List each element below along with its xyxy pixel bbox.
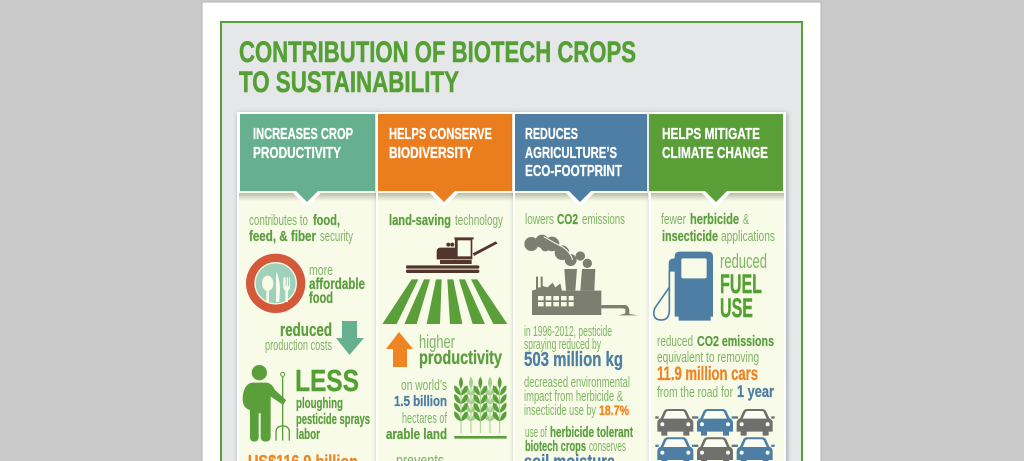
text: pesticide spraying reduced: in 1996-2012, pesticide [524,324,612,340]
icon: down arrow [336,321,364,355]
icon: fuel pump [654,252,713,321]
header: helps conserve biodiversity: BIODIVERSITY [389,145,473,162]
text: world arable land: on world’s [401,378,447,394]
header: helps mitigate climate change [649,114,783,207]
text: reduced fuel use: reduced [720,251,767,273]
text: more affordable food: affordable [309,276,365,293]
header: increases crop productivity [240,114,375,207]
text: herbicide tolerant soil moisture: use of [525,425,548,441]
text: reduced fuel use: USE [720,293,753,323]
header: helps mitigate climate change: CLIMATE CHANGE [662,145,768,162]
text: decreased environmental impact: decreased environmental [524,375,630,391]
text: more affordable food: food [309,290,333,307]
text: herbicide tolerant soil moisture [524,425,633,461]
panel: column 1 increases crop productivity [238,113,377,461]
text: less ploughing pesticide sprays labor: labor [296,427,320,443]
text: food feed fiber security: contributes to [249,213,308,229]
text: reduced fuel use: FUEL [720,269,762,299]
text: less ploughing pesticide sprays labor: pesticide sprays [296,412,370,428]
title [239,36,636,99]
text: reduced fuel use [720,251,767,323]
text: more affordable food [309,263,365,307]
text: CO2 equivalent cars: CO2 emissions [697,334,774,350]
text: fewer herbicide insecticide applications: insecticide [662,229,718,245]
panel: green-framed background [221,22,802,461]
text: decreased environmental impact [524,375,630,419]
text: world arable land: hectares of [402,411,448,427]
header: increases crop productivity: PRODUCTIVITY [253,145,341,162]
text: CO2 equivalent cars: 11.9 million cars [657,364,758,385]
text: decreased environmental impact: impact from herbicide & [524,389,623,405]
text: world arable land: arable land [386,427,447,443]
text: fewer herbicide insecticide applications [661,212,775,245]
text: higher productivity: higher [419,332,455,352]
text: world arable land: 1.5 billion [394,393,447,410]
header: reduces agriculture's eco-footprint: REDUCES [525,126,578,143]
icon: plate with cutlery [246,254,305,313]
text: CO2 equivalent cars: reduced [657,334,693,350]
text: less ploughing pesticide sprays labor: LESS [295,363,359,398]
text: CO2 equivalent cars: from the road for [657,385,733,401]
title: CONTRIBUTION OF BIOTECH CROPS [239,36,636,69]
header: reduces agriculture's eco-footprint: ECO-FOOTPRINT [525,163,622,180]
text: food feed fiber security: food, [313,213,340,229]
text: CO2 equivalent cars: 1 year [737,382,774,401]
text: higher productivity: productivity [419,348,502,369]
header: helps mitigate climate change: HELPS MITIGATE [662,126,760,143]
icon: rows of cars [655,409,775,461]
text: CO2 equivalent cars [657,334,774,401]
text: higher productivity [419,332,502,369]
icon: up arrow [386,332,413,367]
icon: combine harvester on field [382,237,507,324]
text: herbicide tolerant soil moisture: herbicide tolerant [550,425,633,441]
text: reduced production costs: production costs [265,338,332,354]
title: TO SUSTAINABILITY [239,66,459,99]
text: food feed fiber security [249,213,353,245]
text: CO2 equivalent cars: equivalent to removing [657,350,759,366]
text: reduced production costs [265,320,332,354]
header: helps conserve biodiversity [378,114,512,207]
text: lowers CO2 emissions: CO2 [557,212,578,228]
text: food feed fiber security: security [320,229,353,245]
header: increases crop productivity: INCREASES CROP [253,126,353,143]
text: world arable land [386,378,448,443]
panel: column 4 helps mitigate climate change [649,113,785,461]
text: decreased environmental impact: 18.7% [599,402,629,418]
text: less ploughing pesticide sprays labor [295,363,370,443]
icon: factory with smoke [524,235,638,315]
text: fewer herbicide insecticide applications: fewer [661,212,686,228]
text: more affordable food: more [309,263,333,279]
text: decreased environmental impact: insecticide use by [524,403,596,419]
header: reduces agriculture's eco-footprint [515,114,647,207]
text: lowers CO2 emissions: lowers [525,212,554,228]
text: food feed fiber security: feed, & fiber [249,229,316,245]
text: pesticide spraying reduced: spraying reduced by [524,337,601,353]
icon: farmer with pitchfork [243,365,289,442]
text: fewer herbicide insecticide applications: applications [721,229,775,245]
text: lowers CO2 emissions: emissions [582,212,625,228]
panel: column 2 helps conserve biodiversity [377,113,514,461]
text: herbicide tolerant soil moisture: biotech crops [525,439,586,455]
page sheet [202,2,821,461]
text: less ploughing pesticide sprays labor: ploughing [296,396,343,412]
text: lowers CO2 emissions [525,212,625,228]
text: land-saving technology: land-saving [389,213,451,229]
icon: wheat [454,377,507,439]
panel: column 3 reduces eco-footprint [514,113,649,461]
text: pesticide spraying reduced [524,324,623,371]
text: pesticide spraying reduced: 503 million kg [524,349,623,371]
header: helps conserve biodiversity: HELPS CONSERVE [389,126,492,143]
text: land-saving technology: technology [455,213,504,229]
text: herbicide tolerant soil moisture: conserves [589,439,626,455]
text: fewer herbicide insecticide applications: herbicide [690,212,739,228]
text: fewer herbicide insecticide applications: & [743,212,749,228]
header: reduces agriculture's eco-footprint: AGRICULTURE’S [525,145,617,162]
text: reduced production costs: reduced [280,320,332,340]
